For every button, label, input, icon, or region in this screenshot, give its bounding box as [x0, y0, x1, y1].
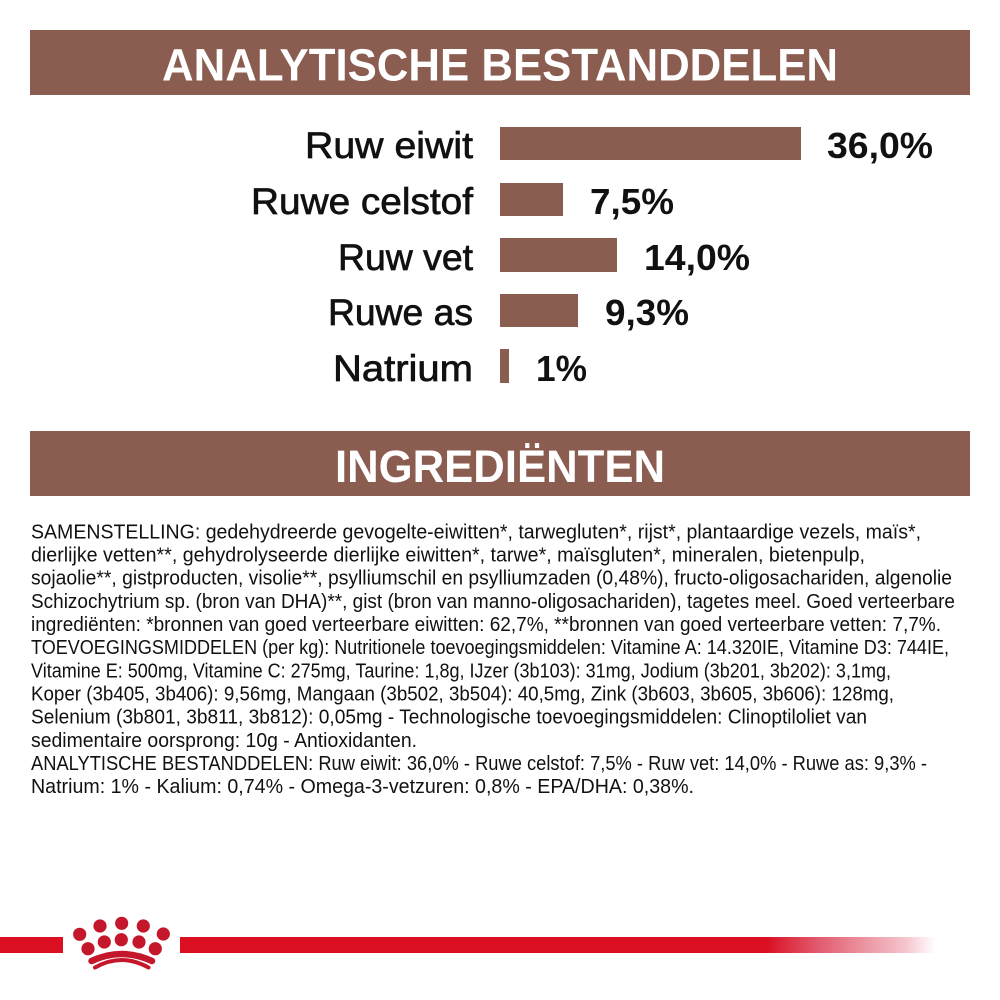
row: ruw eiwit: Ruw eiwit	[305, 125, 474, 166]
row: ruwe celstof	[251, 181, 674, 222]
text block: ingredient list: Vitamine E: 500mg, Vitamine C: 275mg, Taurine: 1,8g, IJzer (3b103): 31mg, Jodium (3b201, 3b202): 3,1mg,	[31, 660, 891, 682]
text block: ingredient list: Schizochytrium sp. (bron van DHA)**, gist (bron van manno-oligosachariden), tagetes meel. Goed verteerbare	[31, 591, 955, 613]
row: natrium	[333, 348, 587, 389]
row: ruwe celstof: 7,5%	[590, 181, 674, 222]
heading: analytische bestanddelen	[30, 30, 970, 95]
row: ruw vet: 14,0%	[644, 237, 750, 278]
row: ruwe celstof: Ruwe celstof	[251, 181, 474, 222]
bar chart: analytical constituents	[251, 125, 933, 389]
row: ruwe as	[328, 292, 689, 333]
heading: ingredienten: INGREDIËNTEN	[335, 441, 665, 492]
text block: ingredient list: dierlijke vetten**, gehydrolyseerde dierlijke eiwitten*, tarwe*, maïsgluten*, mineralen, bietenpulp,	[31, 544, 865, 566]
row: ruwe as: Ruwe as	[328, 292, 473, 333]
row: natrium: 1%	[536, 348, 587, 389]
heading: analytische bestanddelen: ANALYTISCHE BESTANDDELEN	[162, 40, 838, 90]
text block: ingredient list: ANALYTISCHE BESTANDDELEN: Ruw eiwit: 36,0% - Ruwe celstof: 7,5% - Ruw vet: 14,0% - Ruwe as: 9,3% -	[31, 753, 927, 775]
text block: ingredient list: SAMENSTELLING: gedehydreerde gevogelte-eiwitten*, tarwegluten*, rijst*, plantaardige vezels, maïs*,	[31, 522, 921, 544]
row: ruw vet	[338, 237, 750, 278]
text block: ingredient list: sojaolie**, gistproducten, visolie**, psylliumschil en psylliumzaden (0,48%), fructo-oligosachariden, algenolie	[31, 568, 952, 590]
row: ruw eiwit: 36,0%	[827, 125, 933, 166]
icon: royal canin crown logo	[73, 917, 170, 968]
heading: ingredienten	[30, 431, 970, 496]
text block: ingredient list: Koper (3b405, 3b406): 9,56mg, Mangaan (3b502, 3b504): 40,5mg, Zink (3b603, 3b605, 3b606): 128mg,	[31, 684, 894, 706]
text block: ingredient list	[31, 522, 955, 798]
row: natrium: Natrium	[333, 348, 473, 389]
row: ruw eiwit	[305, 125, 933, 166]
row: ruw vet: Ruw vet	[338, 237, 474, 278]
text block: ingredient list: ingrediënten: *bronnen van goed verteerbare eiwitten: 62,7%, **bronnen van goed verteerbare vetten: 7,7%.	[31, 614, 941, 636]
text block: ingredient list: sedimentaire oorsprong: 10g - Antioxidanten.	[31, 730, 417, 752]
text block: ingredient list: Selenium (3b801, 3b811, 3b812): 0,05mg - Technologische toevoegingsmiddelen: Clinoptiloliet van	[31, 707, 867, 729]
footer stripe: right fading	[180, 937, 935, 953]
footer stripe: left	[0, 937, 63, 953]
text block: ingredient list: Natrium: 1% - Kalium: 0,74% - Omega-3-vetzuren: 0,8% - EPA/DHA: 0,38%.	[31, 776, 694, 798]
row: ruwe as: 9,3%	[605, 292, 689, 333]
